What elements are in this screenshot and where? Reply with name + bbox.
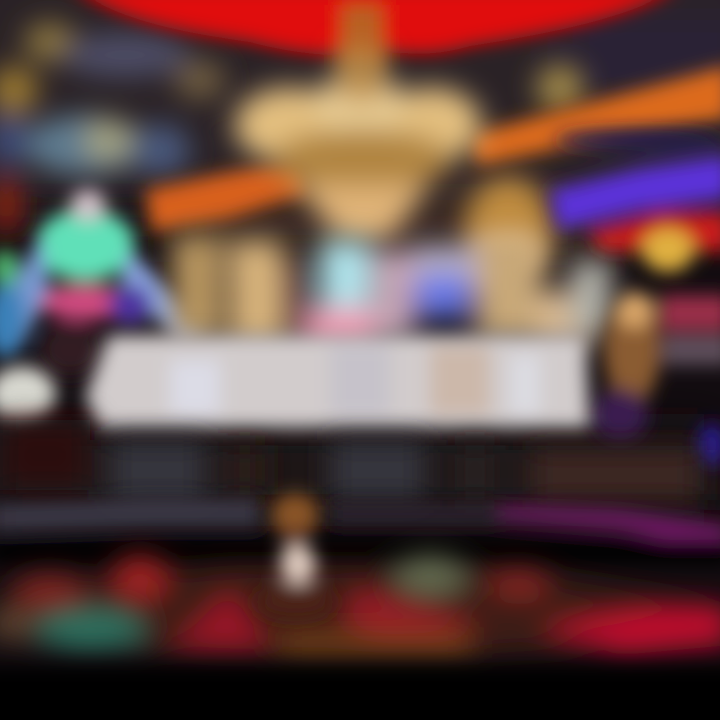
chandelier [234,50,552,280]
wall haze [0,0,720,510]
orange band left [145,160,310,232]
floor pattern [0,555,720,657]
orange band right [468,65,720,166]
left ceiling lights [0,22,584,235]
seated figures behind table [172,235,612,348]
red ceiling arc [70,0,680,70]
teal figure left [0,189,205,376]
under-table columns [0,420,700,500]
white blob left [0,366,56,422]
central lamp [255,493,335,619]
stage bands [0,500,720,564]
white table [85,335,590,428]
bottom black strip [0,666,720,720]
right side figures [592,292,720,467]
purple band [550,130,720,272]
